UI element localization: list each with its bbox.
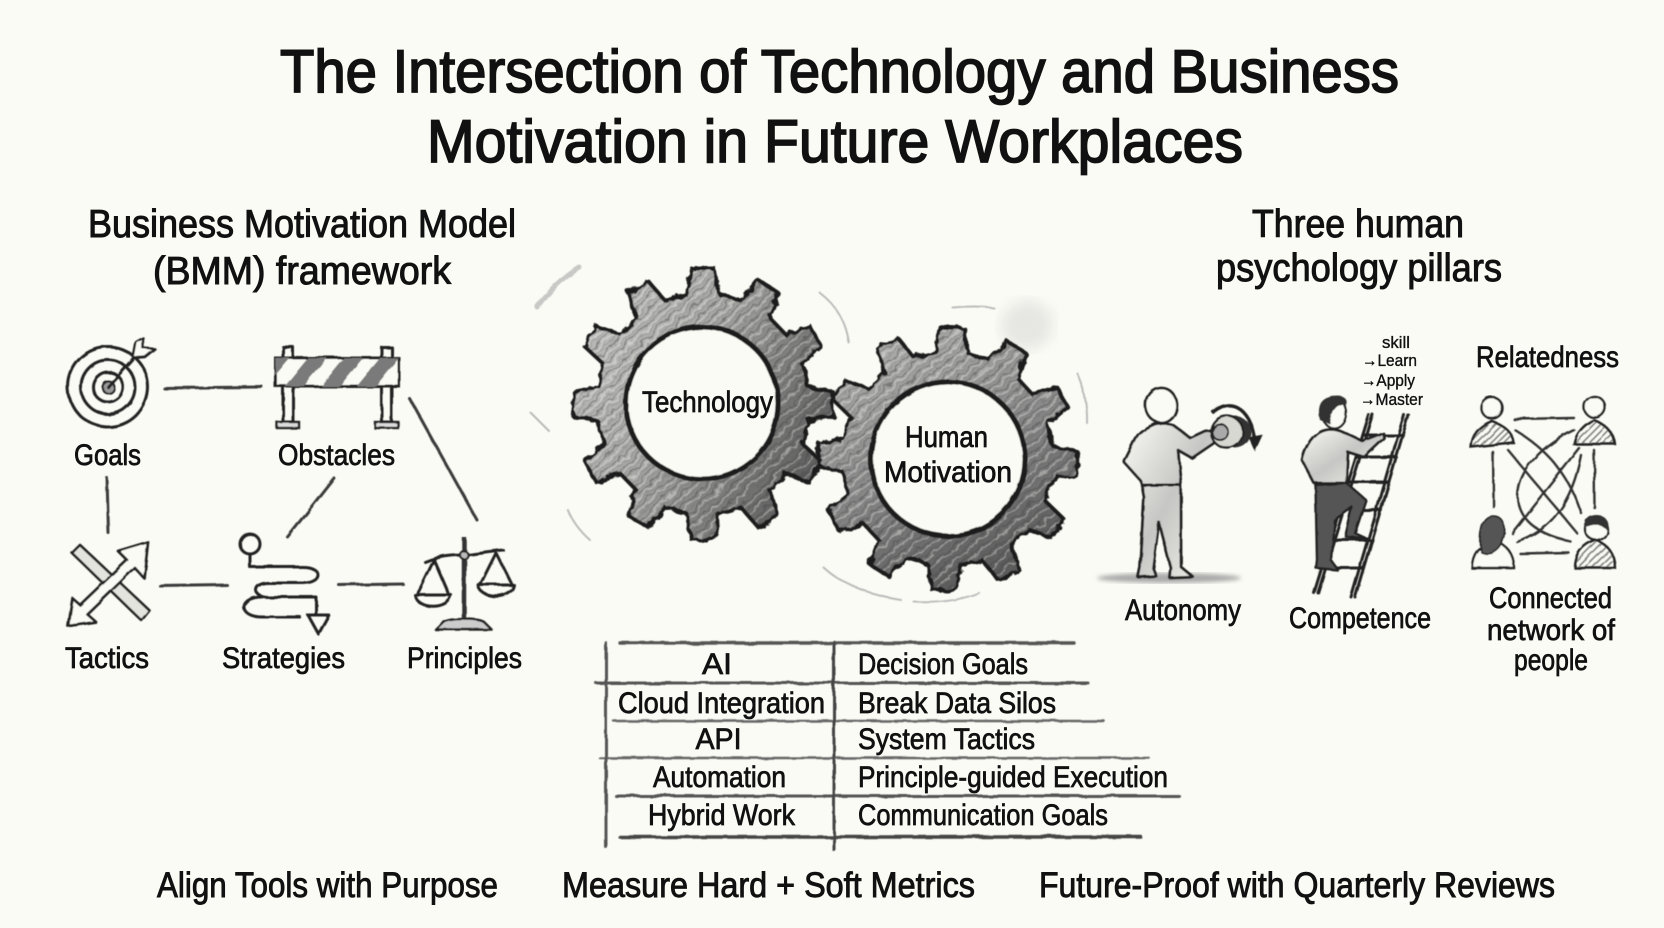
gear: Technology bbox=[573, 268, 833, 540]
label: Human Motivation: Motivation bbox=[884, 456, 1012, 489]
label: Human Motivation: Human bbox=[905, 421, 988, 454]
table right column: Communication Goals bbox=[858, 799, 1108, 832]
heading: Three human psychology pillars: psychology pillars bbox=[1216, 247, 1502, 290]
decorative sketch marks around gears bbox=[531, 267, 1087, 602]
label: Connected network of people: network of bbox=[1487, 614, 1616, 647]
icon: winding path (Strategies) bbox=[240, 534, 329, 634]
label: Autonomy: Autonomy bbox=[1125, 594, 1241, 627]
label: skill Learn Apply Master bbox=[1360, 333, 1423, 409]
table left column: Automation bbox=[653, 761, 786, 794]
icon: crossed arrows (Tactics) bbox=[68, 542, 149, 626]
takeaway: Measure Hard + Soft Metrics: Measure Hard + Soft Metrics bbox=[562, 866, 975, 905]
gear hole: Human Motivation bbox=[871, 382, 1025, 536]
title: Motivation in Future Workplaces bbox=[427, 108, 1243, 175]
takeaway: Future-Proof with Quarterly Reviews: Future-Proof with Quarterly Reviews bbox=[1039, 866, 1555, 905]
label: Connected network of people: people bbox=[1514, 644, 1588, 677]
person top left bbox=[1471, 398, 1514, 447]
label: Relatedness: Relatedness bbox=[1476, 341, 1619, 374]
label: Connected network of people: Connected bbox=[1489, 582, 1612, 615]
icon: person turning a dial (Autonomy) bbox=[1097, 388, 1261, 583]
label: skill Learn Apply Master: →Master bbox=[1360, 390, 1423, 409]
label: skill Learn Apply Master: →Learn bbox=[1362, 351, 1417, 370]
label: Strategies: Strategies bbox=[222, 642, 345, 675]
icon: target with arrow (Goals) bbox=[68, 338, 155, 427]
connector lines between BMM elements bbox=[107, 387, 477, 586]
icon: balance scales (Principles) bbox=[415, 537, 514, 630]
table right column bbox=[858, 648, 1168, 832]
table rules bbox=[596, 642, 1179, 850]
table left column: AI bbox=[702, 648, 732, 681]
title: The Intersection of Technology and Business bbox=[280, 38, 1399, 105]
icon: barricade (Obstacles) bbox=[276, 347, 399, 428]
gear hole: Technology bbox=[626, 327, 778, 479]
heading: Business Motivation Model framework bbox=[88, 203, 516, 293]
label: skill Learn Apply Master: →Apply bbox=[1361, 371, 1415, 390]
table left column: Cloud Integration bbox=[618, 687, 825, 720]
panel: psychology pillars bbox=[1097, 333, 1619, 677]
table right column: System Tactics bbox=[858, 723, 1035, 756]
label: Human Motivation bbox=[884, 421, 1012, 489]
label: Tactics: Tactics bbox=[65, 642, 149, 675]
label: skill Learn Apply Master: skill bbox=[1382, 333, 1410, 352]
title bbox=[280, 38, 1399, 175]
panel: interlocking gears bbox=[531, 267, 1087, 602]
gear: Human Motivation bbox=[814, 323, 1082, 595]
panel: comparison table bbox=[596, 642, 1179, 850]
label: Principles: Principles bbox=[407, 642, 522, 675]
table right column: Principle-guided Execution bbox=[858, 761, 1168, 794]
label: Goals: Goals bbox=[74, 439, 141, 472]
label: Technology: Technology bbox=[642, 386, 773, 419]
bottom takeaways bbox=[157, 866, 1555, 905]
icon: person climbing ladder (Competence) bbox=[1302, 396, 1408, 597]
table left column: Hybrid Work bbox=[648, 799, 796, 832]
label: Connected network of people bbox=[1487, 582, 1616, 677]
table left column bbox=[618, 648, 825, 832]
takeaway: Align Tools with Purpose: Align Tools with Purpose bbox=[157, 866, 498, 905]
person bottom right bbox=[1575, 515, 1615, 568]
heading: Business Motivation Model framework: (BMM) framework bbox=[153, 250, 451, 293]
label: Obstacles: Obstacles bbox=[278, 439, 395, 472]
table right column: Break Data Silos bbox=[858, 687, 1056, 720]
heading: Business Motivation Model framework: Business Motivation Model bbox=[88, 203, 516, 246]
heading: Three human psychology pillars bbox=[1216, 203, 1502, 290]
icon: connected network of four people bbox=[1471, 396, 1615, 568]
label: Competence: Competence bbox=[1289, 602, 1431, 635]
heading: Three human psychology pillars: Three human bbox=[1252, 203, 1464, 246]
network lines bbox=[1493, 418, 1594, 554]
person bottom left bbox=[1472, 516, 1514, 568]
table left column: API bbox=[696, 723, 742, 756]
person top right bbox=[1574, 396, 1615, 444]
table right column: Decision Goals bbox=[858, 648, 1028, 681]
panel: BMM framework diagram bbox=[65, 338, 522, 675]
